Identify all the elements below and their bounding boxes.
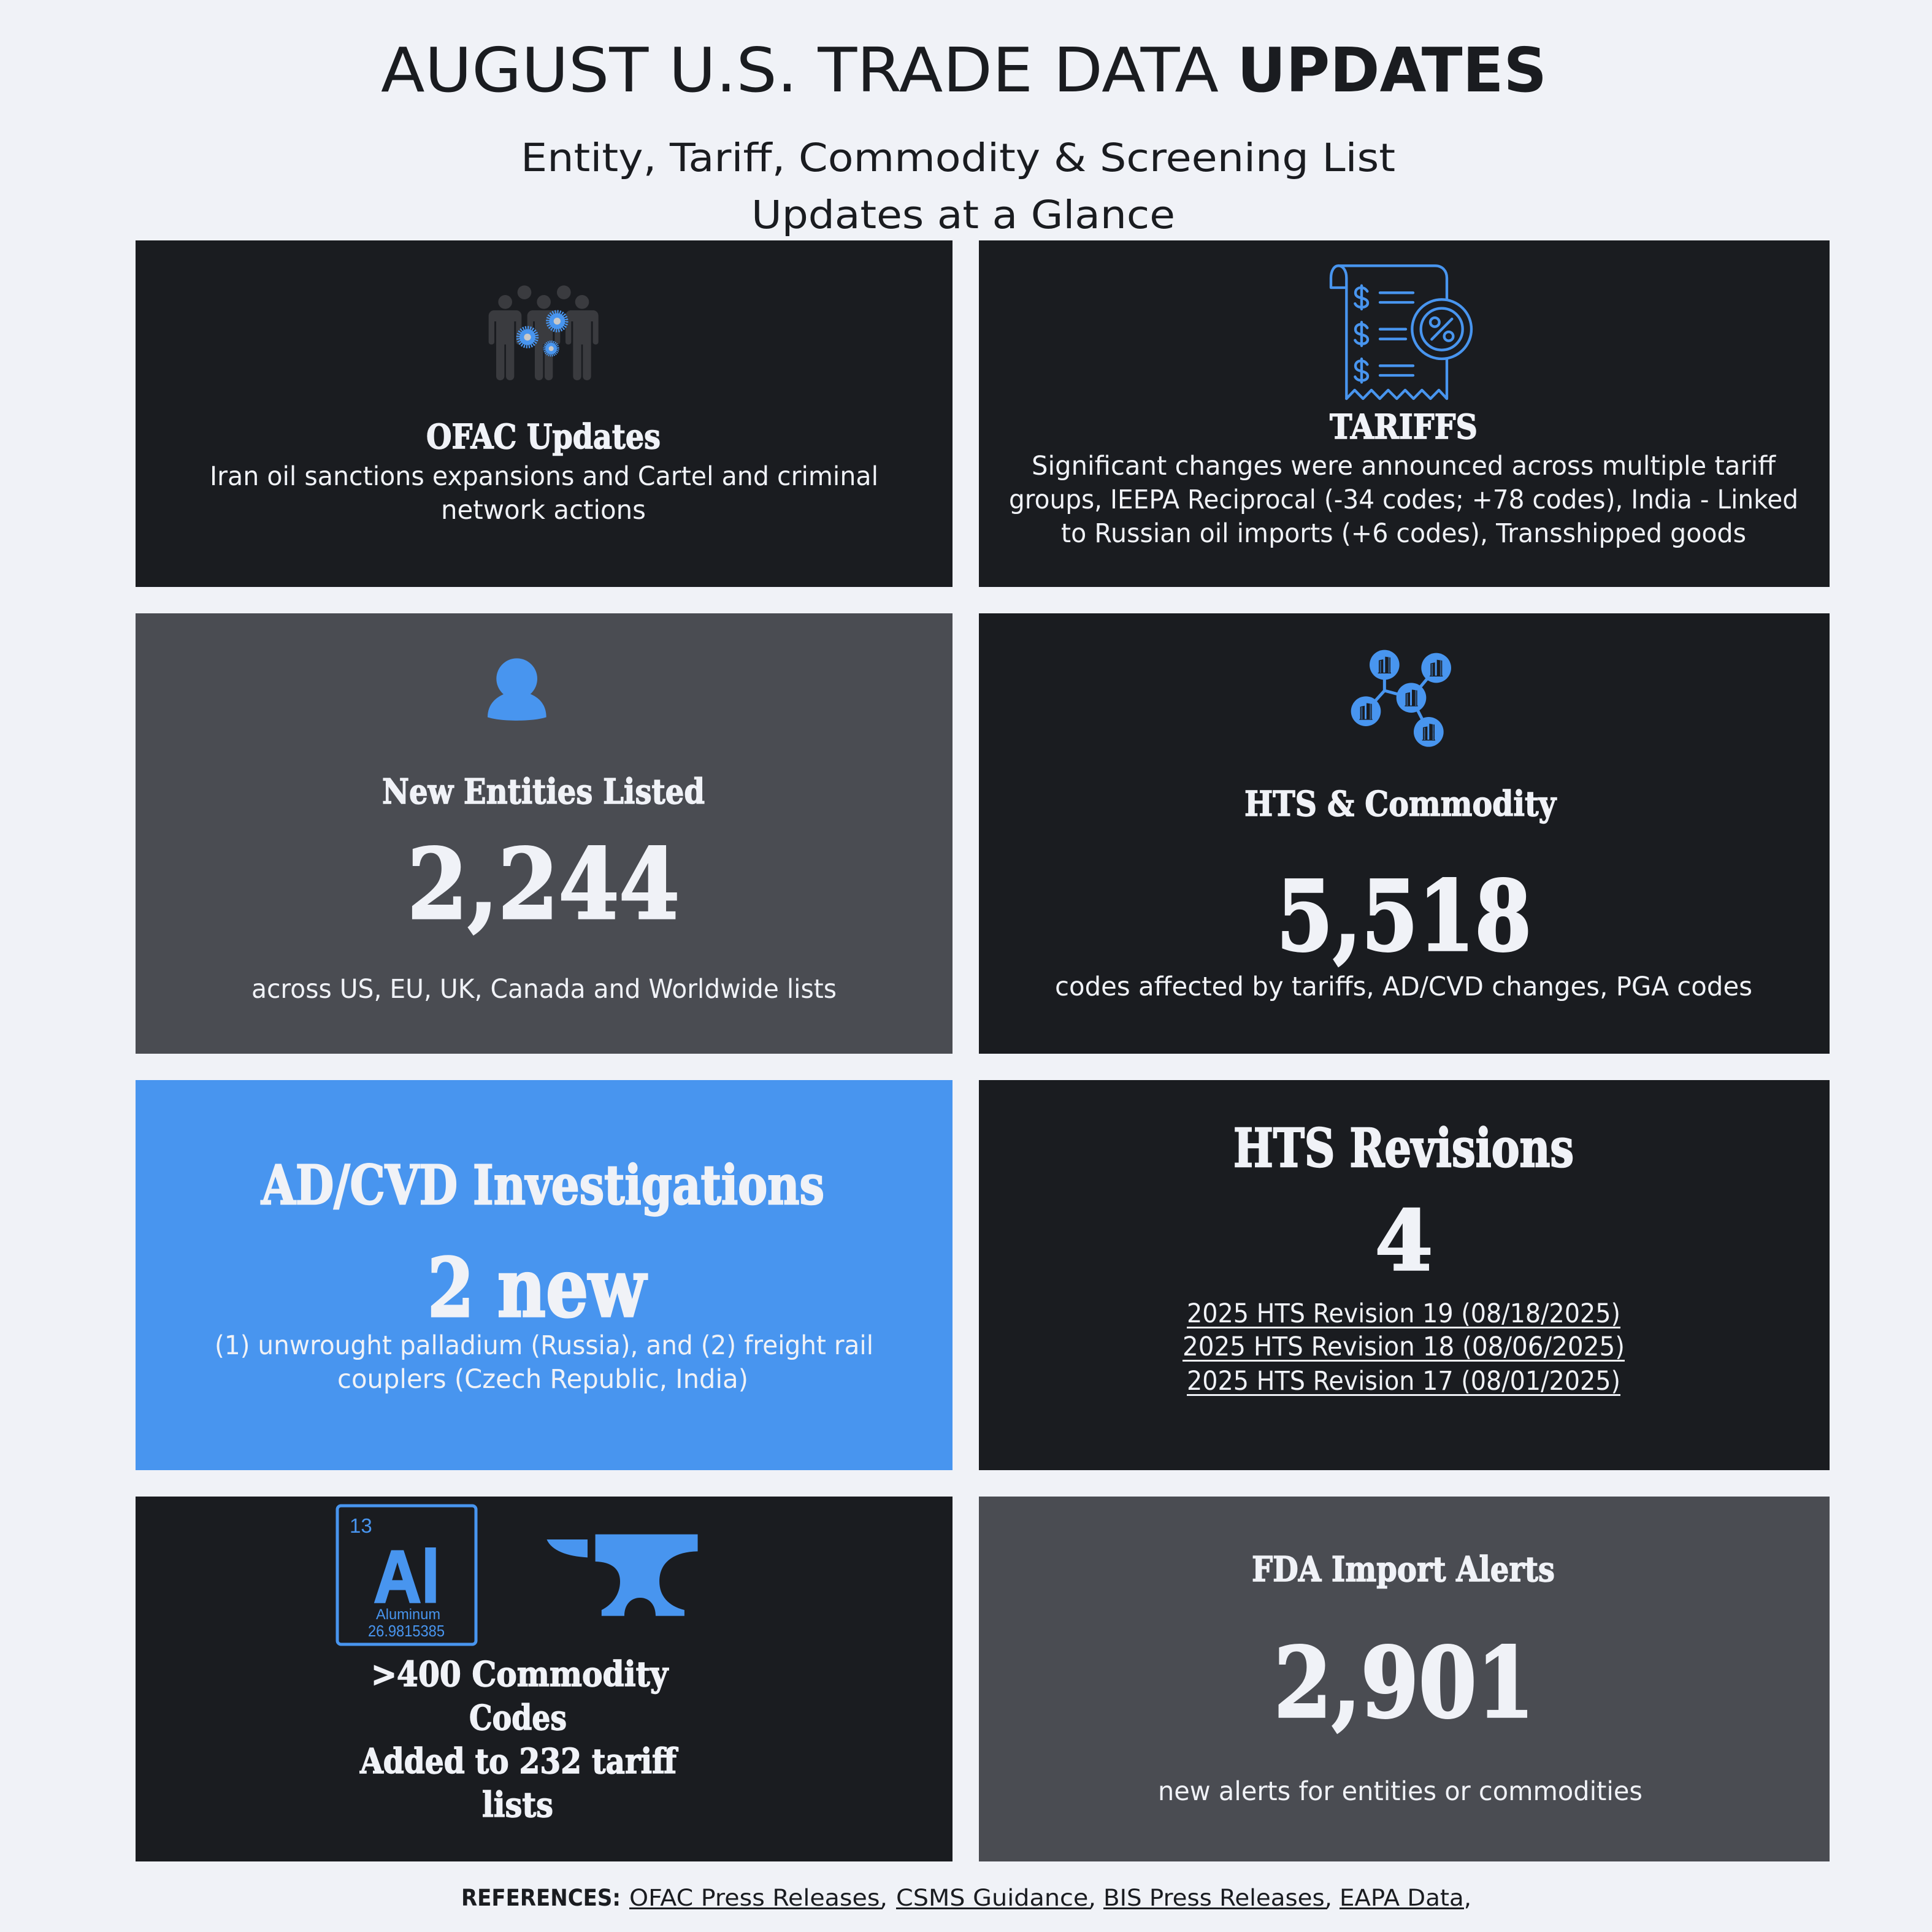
subtitle (521, 136, 1395, 237)
subtitle: Updates at a Glance (751, 193, 1175, 237)
heading: TARIFFS: TARIFFS (1330, 407, 1478, 447)
icon: aluminum element tile: 26.9815385 (368, 1622, 445, 1640)
text: OFAC description (210, 461, 878, 526)
number: 5,518: 5,518 (1276, 860, 1531, 973)
heading: OFAC Updates: OFAC Updates (426, 416, 661, 456)
text: tariffs description: Significant changes were announced across multiple tariff (1032, 451, 1776, 481)
text: tariffs description (1009, 451, 1798, 549)
heading: commodity codes added (359, 1654, 678, 1825)
references: REFERENCES: (461, 1885, 621, 1911)
number: 2,901: 2,901 (1274, 1627, 1535, 1740)
text: tariffs description: to Russian oil imports (+6 codes), Transshipped goods (1061, 518, 1746, 549)
heading: commodity codes added: >400 Commodity (371, 1654, 669, 1695)
panel: OFAC updates (136, 240, 953, 587)
title: UPDATES (1237, 34, 1547, 106)
icon: network of buildings (1351, 650, 1451, 747)
icon: person (488, 658, 546, 721)
heading: commodity codes added: lists (482, 1785, 553, 1825)
number: 2,244: 2,244 (407, 828, 680, 941)
heading: HTS Revisions: HTS Revisions (1233, 1117, 1574, 1179)
heading: commodity codes added: Added to 232 tariff (359, 1741, 678, 1782)
text: revision links: 2025 HTS Revision 18 (08/06/2025) (1183, 1332, 1625, 1362)
references: BIS Press Releases, (1103, 1885, 1332, 1911)
number: 2 new: 2 new (427, 1241, 648, 1336)
icon: aluminum element tile: 13 (350, 1514, 372, 1537)
text: AD/CVD description (215, 1330, 873, 1395)
text: tariffs description: groups, IEEPA Reciprocal (-34 codes; +78 codes), India - Linked (1009, 485, 1798, 515)
text: OFAC description: network actions (441, 495, 646, 526)
subtitle: Entity, Tariff, Commodity & Screening List (521, 136, 1395, 180)
references: EAPA Data, (1340, 1885, 1471, 1911)
title (381, 34, 1547, 106)
panel: new entities listed (136, 613, 953, 1054)
panel: FDA import alerts (979, 1497, 1830, 1861)
panel: HTS and commodity (979, 613, 1830, 1054)
text: revision links: 2025 HTS Revision 17 (08/01/2025) (1187, 1366, 1620, 1397)
title: AUGUST U.S. TRADE DATA (381, 34, 1219, 106)
text: FDA description: new alerts for entities or commodities (1158, 1776, 1643, 1807)
panel: AD/CVD investigations (136, 1080, 953, 1470)
icon: aluminum element tile: Aluminum (376, 1606, 440, 1623)
number: 4: 4 (1375, 1192, 1433, 1289)
text: revision links (1183, 1298, 1625, 1397)
panel: commodity codes (136, 1497, 953, 1861)
panel: tariffs (979, 240, 1830, 587)
text: revision links: 2025 HTS Revision 19 (08/18/2025) (1187, 1298, 1620, 1329)
heading: HTS & Commodity: HTS & Commodity (1244, 784, 1557, 824)
text: entities description: across US, EU, UK, Canada and Worldwide lists (251, 974, 837, 1005)
heading: New Entities Listed: New Entities Listed (382, 772, 705, 812)
references: CSMS Guidance, (896, 1885, 1096, 1911)
icon: aluminum element tile: Al (374, 1535, 440, 1618)
text: HTS description: codes affected by tariffs, AD/CVD changes, PGA codes (1055, 972, 1752, 1002)
icon: people with virus markers (489, 285, 599, 380)
panel: HTS revisions (979, 1080, 1830, 1470)
references (461, 1885, 1471, 1911)
heading: AD/CVD Investigations: AD/CVD Investigations (261, 1153, 824, 1217)
text: AD/CVD description: couplers (Czech Republic, India) (337, 1364, 748, 1395)
heading: commodity codes added: Codes (469, 1698, 567, 1738)
heading: FDA Import Alerts: FDA Import Alerts (1252, 1549, 1555, 1590)
icon: anvil (546, 1535, 698, 1616)
text: AD/CVD description: (1) unwrought palladium (Russia), and (2) freight rail (215, 1330, 873, 1361)
references: OFAC Press Releases, (629, 1885, 887, 1911)
icon: receipt with percent badge (1331, 266, 1471, 399)
text: OFAC description: Iran oil sanctions expansions and Cartel and criminal (210, 461, 878, 492)
icon: aluminum element tile (337, 1506, 476, 1644)
